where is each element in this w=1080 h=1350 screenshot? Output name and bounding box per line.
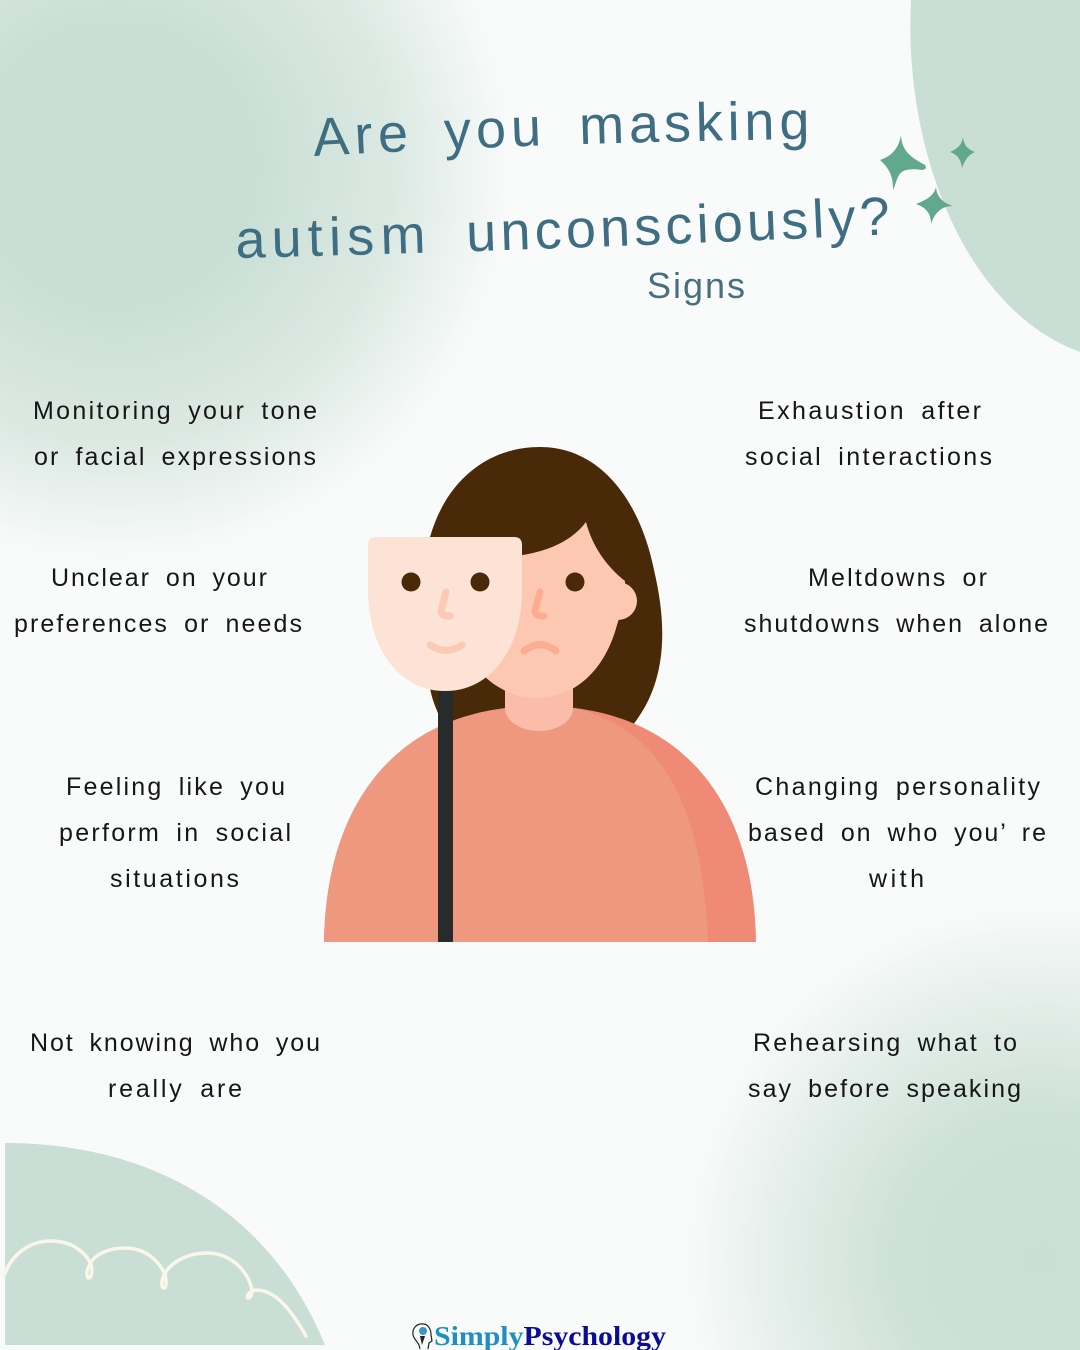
soft gradient: bottom right bbox=[660, 880, 1080, 1350]
subtitle: Signs: Signs bbox=[647, 265, 745, 306]
sign: changing personality bbox=[748, 773, 1046, 893]
sign: perform in social situations: Feeling like you bbox=[66, 773, 285, 801]
sign: monitoring tone bbox=[33, 397, 317, 471]
title bbox=[238, 101, 888, 258]
person nose bbox=[535, 592, 544, 616]
sign: meltdowns: Meltdowns or bbox=[808, 564, 987, 592]
sign: changing personality: with bbox=[868, 865, 924, 893]
sign: changing personality: Changing personality bbox=[755, 773, 1040, 801]
sign: perform in social situations bbox=[59, 773, 291, 893]
sign: meltdowns bbox=[744, 564, 1048, 638]
title: masking bbox=[582, 101, 806, 150]
sign: not knowing who you are: Not knowing who you bbox=[30, 1029, 320, 1057]
sweater bbox=[324, 706, 756, 942]
sign: unclear preferences: preferences or needs bbox=[14, 610, 302, 638]
sign: exhaustion: social interactions bbox=[745, 443, 992, 471]
sign: rehearsing: say before speaking bbox=[748, 1075, 1021, 1103]
sign: rehearsing: Rehearsing what to bbox=[753, 1029, 1017, 1057]
sign: unclear preferences bbox=[14, 564, 302, 638]
illustration: person holding mask bbox=[324, 447, 756, 942]
logo: Simply Psychology bbox=[413, 1321, 667, 1350]
title: unconsciously? bbox=[469, 197, 888, 252]
logo head icon bbox=[413, 1324, 432, 1349]
sign: unclear preferences: Unclear on your bbox=[51, 564, 267, 592]
sign: monitoring tone: or facial expressions bbox=[34, 443, 316, 471]
sweater highlight bbox=[324, 706, 708, 942]
sign: changing personality: based on who you’ re bbox=[748, 819, 1046, 847]
neck bbox=[505, 670, 573, 731]
hair bbox=[430, 447, 662, 728]
decorative blob: bottom left with cloud line bbox=[4, 1143, 325, 1345]
sign: not knowing who you are: really are bbox=[108, 1075, 242, 1103]
sign: perform in social situations: perform in social bbox=[59, 819, 291, 847]
sign: not knowing who you are bbox=[30, 1029, 320, 1103]
icon: sparkles bbox=[880, 135, 975, 224]
face bbox=[480, 522, 625, 698]
mask smile bbox=[430, 645, 462, 650]
cloud line bbox=[4, 1241, 306, 1336]
title: Are bbox=[314, 118, 406, 156]
mask bbox=[368, 537, 522, 691]
mask eyes bbox=[402, 572, 490, 592]
title: you bbox=[444, 117, 538, 160]
sign: perform in social situations: situations bbox=[110, 865, 239, 893]
sign: monitoring tone: Monitoring your tone bbox=[33, 397, 317, 425]
decorative blob: top right bbox=[910, 0, 1080, 352]
sign: meltdowns: shutdowns when alone bbox=[744, 610, 1048, 638]
sign: exhaustion: Exhaustion after bbox=[758, 397, 981, 425]
person frown bbox=[524, 644, 556, 651]
stick bbox=[438, 685, 453, 942]
sign: rehearsing bbox=[748, 1029, 1021, 1103]
title: autism bbox=[238, 216, 422, 258]
sign: exhaustion bbox=[745, 397, 992, 471]
ear bbox=[599, 582, 637, 620]
soft gradient: top left bbox=[0, 0, 540, 600]
mask nose bbox=[441, 592, 450, 616]
person eye bbox=[566, 572, 584, 592]
